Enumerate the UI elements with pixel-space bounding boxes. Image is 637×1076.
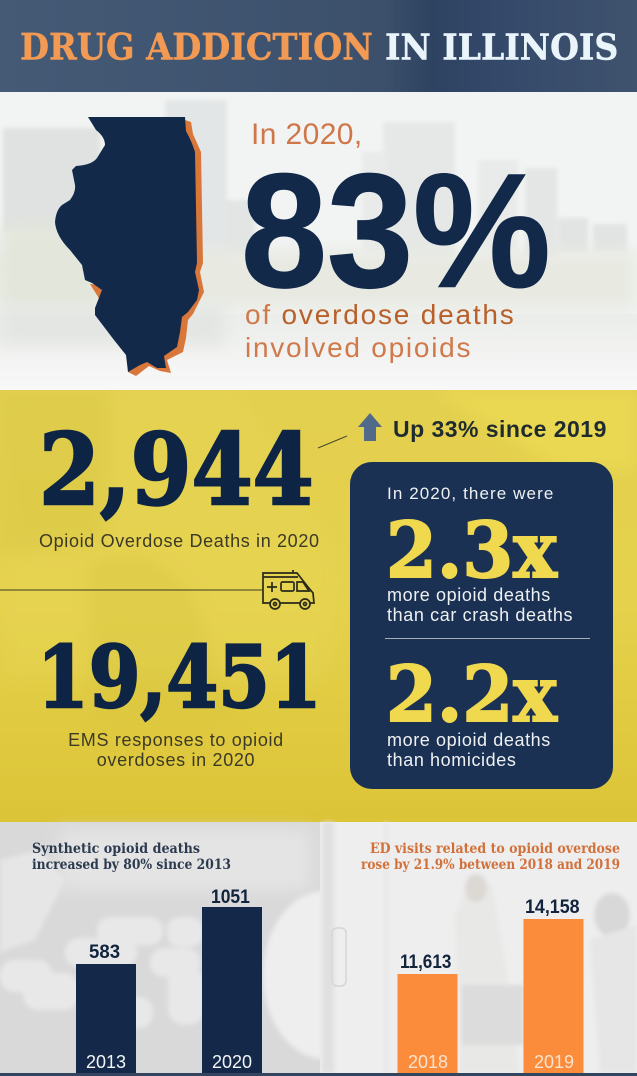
bar: 2018 [398, 951, 458, 1073]
big stat: 2,944: 2,944 [39, 412, 314, 527]
text: car crash comparison: more opioid deaths [387, 585, 551, 605]
bar: 2013: 2013 [86, 1052, 126, 1072]
stat: 2.2x: 2.2x [386, 648, 558, 739]
divider line [0, 589, 262, 591]
title [20, 26, 618, 69]
icon: Illinois map with orange shadow [55, 117, 204, 376]
bar: 2019 [524, 895, 584, 1073]
header band [0, 0, 637, 92]
bar: 2019: 14,158 [525, 895, 580, 917]
bar: 2013: 583 [89, 941, 120, 962]
bar: 2020: 2020 [212, 1052, 252, 1072]
text: homicide comparison [387, 730, 551, 770]
text: in 2020 there were: In 2020, there were [387, 484, 554, 503]
text: car crash comparison [387, 585, 573, 625]
icon: up arrow [358, 413, 382, 441]
bar: 2020 [202, 885, 262, 1073]
caption: opioid overdose deaths: Opioid Overdose Deaths in 2020 [39, 531, 320, 551]
bar: 2020: 1051 [211, 885, 250, 907]
bar: 2019: 2019 [534, 1052, 574, 1072]
heading: synthetic opioid deaths [32, 841, 231, 873]
text: of overdose deaths involved opioids [245, 299, 516, 363]
caption: EMS responses [68, 730, 284, 770]
big stat: 83%: 83% [241, 140, 551, 321]
heading: synthetic opioid deaths: increased by 80% since 2013 [32, 857, 231, 873]
text: homicide comparison: more opioid deaths [387, 730, 551, 750]
text: In 2020: In 2020, [251, 118, 363, 151]
heading: synthetic opioid deaths: Synthetic opioid deaths [32, 841, 200, 857]
icon: ambulance [263, 570, 314, 609]
text: car crash comparison: than car crash deaths [387, 605, 573, 625]
big stat: 19,451: 19,451 [37, 627, 322, 727]
panel: comparison card [350, 462, 613, 789]
caption: EMS responses: overdoses in 2020 [97, 750, 255, 770]
heading: ED visits: ED visits related to opioid overdose [370, 841, 620, 857]
title: IN ILLINOIS [385, 27, 618, 69]
text: up 33% since 2019: Up 33% since 2019 [393, 416, 607, 442]
text: homicide comparison: than homicides [387, 750, 516, 770]
panel: synthetic opioid deaths [0, 822, 387, 1073]
bar: 2013 [76, 941, 136, 1073]
panel: ED visits [320, 822, 637, 1073]
stat: 2.3x: 2.3x [386, 504, 558, 595]
title: DRUG ADDICTION [20, 26, 373, 69]
heading: ED visits [361, 841, 620, 873]
bar: 2018: 11,613 [400, 951, 451, 972]
bottom edge strip [0, 1073, 637, 1076]
bar: 2018: 2018 [408, 1052, 448, 1072]
connector line to up arrow [318, 436, 347, 448]
panel: yellow statistics [0, 390, 637, 822]
text: of overdose deaths involved opioids: of overdose deaths [245, 299, 516, 330]
caption: EMS responses: EMS responses to opioid [68, 730, 284, 750]
text: of overdose deaths involved opioids: involved opioids [245, 332, 472, 363]
panel: skyline hero [0, 92, 637, 390]
